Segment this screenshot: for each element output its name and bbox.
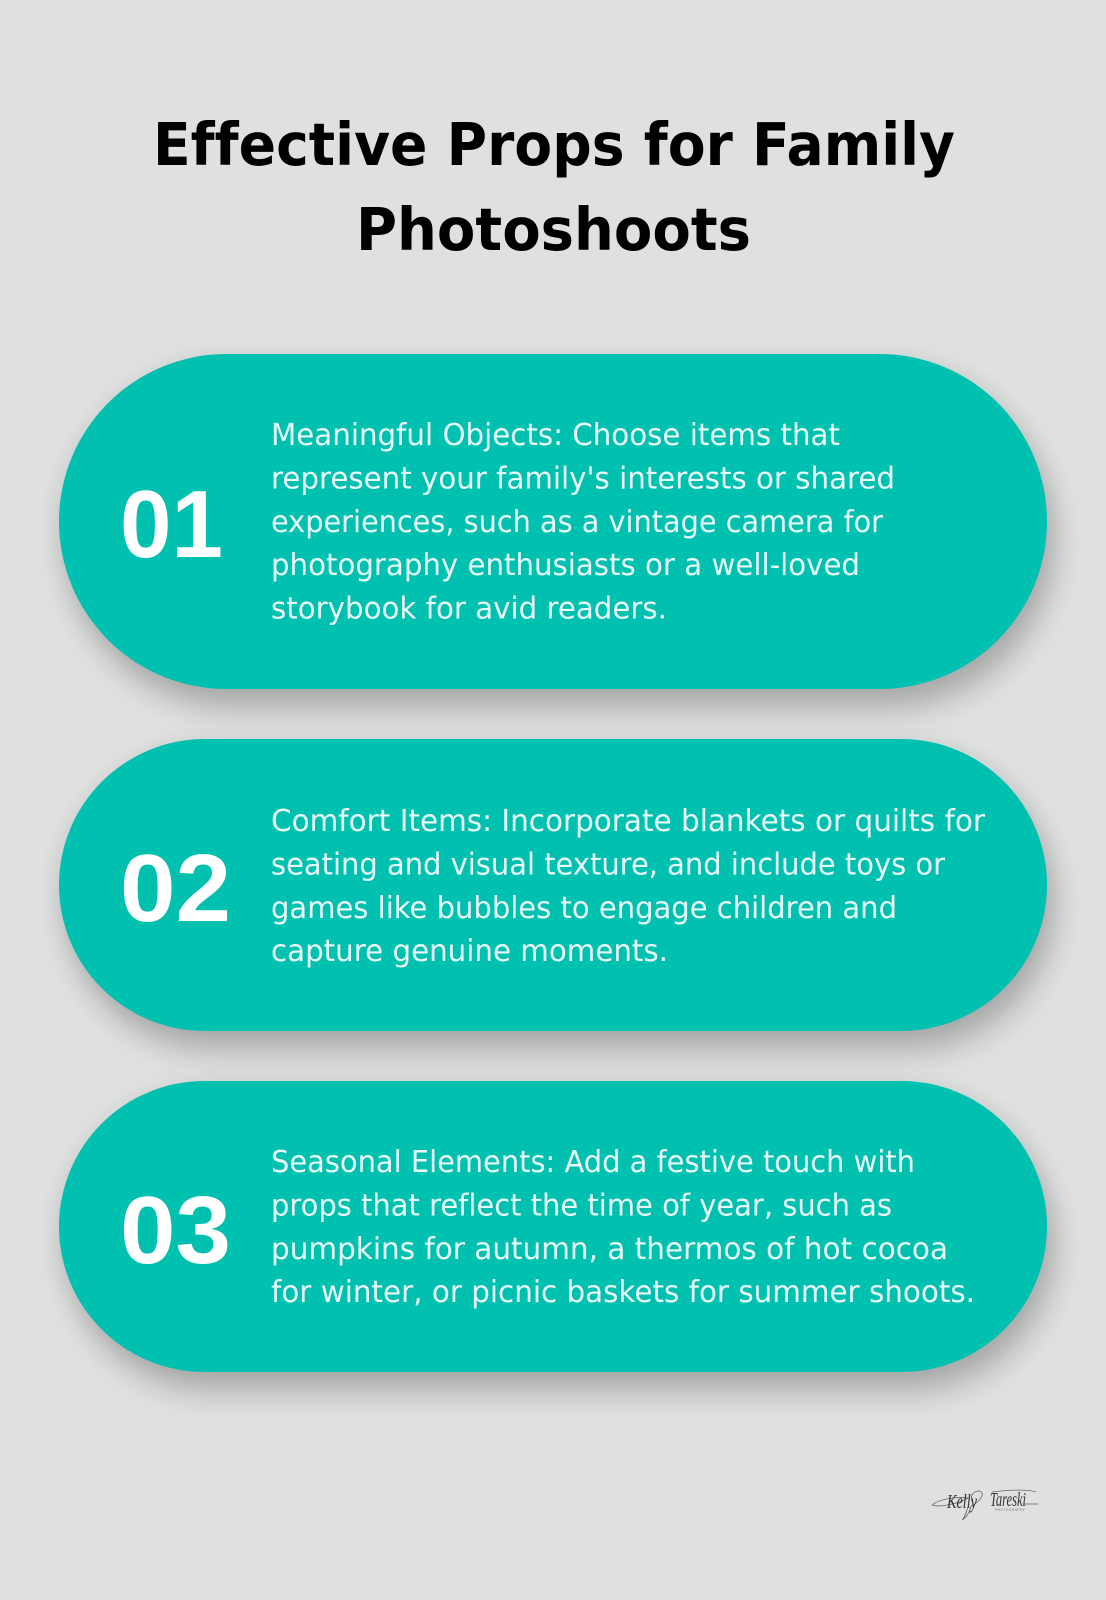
- card 2 number: 02: [120, 835, 231, 942]
- card 2 text: [271, 804, 986, 969]
- title: [153, 110, 955, 264]
- card 3 text: props that reflect the time of year, such as: [271, 1188, 892, 1223]
- title: Effective Props for Family: [153, 110, 955, 179]
- card 3 text: [271, 1145, 975, 1310]
- logo signature: Tareski: [990, 1489, 1026, 1511]
- card 2 text: games like bubbles to engage children and: [271, 891, 897, 926]
- card 1 text: photography enthusiasts or a well-loved: [271, 548, 860, 583]
- pill card 1 background: [59, 354, 1047, 689]
- card 1 text: Meaningful Objects: Choose items that: [271, 418, 840, 453]
- card 1 number: 01: [120, 471, 223, 578]
- card 1 text: [271, 418, 895, 627]
- card 3 text: for winter, or picnic baskets for summer shoots.: [271, 1275, 975, 1310]
- pill card 2 background: [59, 739, 1047, 1031]
- title: Photoshoots: [356, 195, 751, 264]
- card 3 number: 03: [120, 1177, 231, 1284]
- card 2 text: capture genuine moments.: [271, 934, 668, 969]
- card 1 text: represent your family's interests or shared: [271, 461, 895, 496]
- card 1 text: storybook for avid readers.: [271, 592, 667, 627]
- pill card 3 background: [59, 1081, 1047, 1372]
- card 2 text: seating and visual texture, and include toys or: [271, 847, 946, 882]
- card 3 text: Seasonal Elements: Add a festive touch with: [271, 1145, 915, 1180]
- logo signature: Kelly: [946, 1491, 977, 1513]
- logo signature: PHOTOGRAPHY: [995, 1508, 1026, 1512]
- logo signature: [932, 1489, 1038, 1520]
- card 1 text: experiences, such as a vintage camera for: [271, 505, 884, 540]
- card 2 text: Comfort Items: Incorporate blankets or quilts for: [271, 804, 986, 839]
- card 3 text: pumpkins for autumn, a thermos of hot cocoa: [271, 1232, 948, 1267]
